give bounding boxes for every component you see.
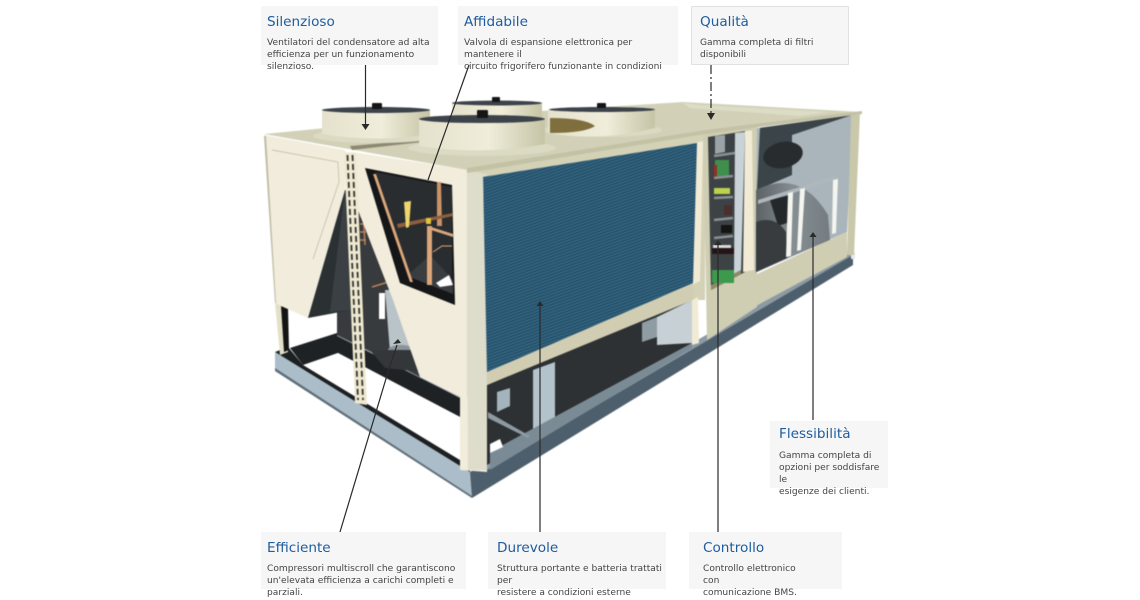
copper pipe ladder	[360, 210, 388, 287]
panel: Flessibilità: opzioni per soddisfare	[779, 463, 880, 473]
panel: Silenzioso: Silenzioso	[267, 14, 335, 30]
panel: Controllo	[689, 532, 842, 598]
arrow: Qualità to filters	[707, 65, 715, 120]
panel: Flessibilità: le	[779, 475, 788, 485]
left legs	[275, 303, 289, 355]
panel: Affidabile	[458, 6, 678, 72]
panel: Efficiente: un'elevata efficienza a carichi completi e	[267, 576, 454, 586]
panel: Durevole: Durevole	[497, 540, 558, 556]
fan: rear centre	[452, 97, 542, 128]
arrow: Flessibilità to options	[810, 232, 816, 420]
rear interior wall	[337, 190, 420, 377]
panel: Flessibilità: esigenze dei clienti.	[779, 487, 869, 497]
condenser coil	[483, 143, 697, 372]
compressor bay	[754, 112, 860, 307]
panel: Affidabile: Affidabile	[464, 14, 528, 30]
panel: Efficiente	[261, 532, 466, 598]
arrow: Silenzioso to fan	[362, 65, 370, 130]
panel: Flessibilità: Gamma completa di	[779, 451, 871, 461]
panel: Controllo: comunicazione BMS.	[703, 588, 797, 598]
rooftop unit illustration	[264, 97, 862, 498]
panel: Flessibilità	[770, 421, 888, 497]
receiver tank motor	[761, 138, 805, 172]
perforated post	[344, 152, 367, 405]
arrow: Efficiente to compressor	[340, 339, 401, 532]
compressor	[370, 290, 425, 372]
panel: Qualità	[692, 6, 848, 64]
panel: Controllo: Controllo elettronico	[703, 564, 796, 574]
refrigerant circuit window	[365, 168, 455, 305]
under-coil machinery bay	[487, 298, 692, 470]
panel: Controllo: Controllo	[703, 540, 764, 556]
condenser fans	[313, 97, 662, 156]
panel: Silenzioso	[261, 6, 438, 72]
panel: Silenzioso: Ventilatori del condensatore ad alta	[267, 38, 430, 48]
panel: Durevole: resistere a condizioni esterne	[497, 588, 631, 598]
base frame	[275, 250, 855, 498]
panel: Qualità: Qualità	[700, 14, 749, 30]
arrow: Affidabile to valve	[428, 65, 469, 180]
control bay	[703, 124, 757, 340]
panel: Silenzioso: silenzioso.	[267, 62, 314, 72]
panel: Affidabile: mantenere il	[464, 50, 522, 60]
long-side frame	[467, 131, 705, 470]
panel: Qualità: disponibili	[700, 50, 746, 60]
cream side panel with window	[264, 135, 487, 472]
white hole in base	[304, 353, 460, 460]
panel: Affidabile: circuito frigorifero funzionante in condizioni	[464, 62, 662, 72]
panel: Durevole: per	[497, 576, 512, 586]
panel: Silenzioso: efficienza per un funzionamento	[267, 50, 415, 60]
arrow: Controllo to board	[714, 240, 722, 532]
panel: Flessibilità: Flessibilità	[779, 426, 851, 442]
panel: Durevole	[488, 532, 666, 598]
fan: front	[408, 110, 556, 156]
roof	[264, 102, 862, 170]
panel: Efficiente: Efficiente	[267, 540, 331, 556]
panel: Qualità: Gamma completa di filtri	[700, 38, 813, 48]
fan: right	[542, 103, 662, 137]
arrow: Durevole to coil	[536, 301, 544, 532]
fan: left	[313, 103, 437, 143]
panel: Durevole: Struttura portante e batteria trattati	[497, 564, 662, 574]
roof edge	[467, 111, 862, 173]
panel: Efficiente: parziali.	[267, 588, 303, 598]
panel: Affidabile: Valvola di espansione elettronica per	[464, 38, 632, 48]
panel: Efficiente: Compressori multiscroll che garantiscono	[267, 564, 456, 574]
panel: Controllo: con	[703, 576, 719, 586]
